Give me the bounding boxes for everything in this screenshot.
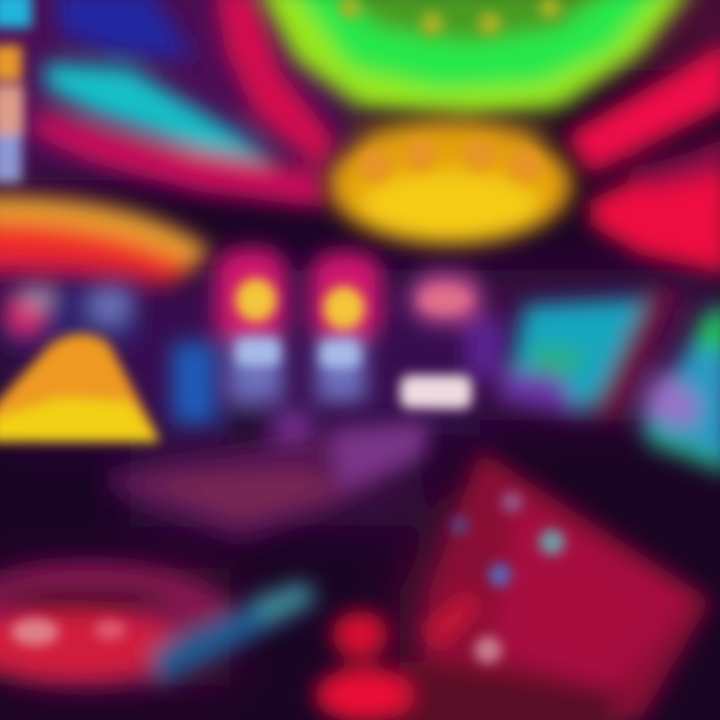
slot lights and white card — [235, 278, 472, 409]
bar and central floor — [100, 420, 430, 540]
roulette table, bottom left — [0, 563, 320, 687]
red craps table — [390, 450, 712, 720]
central pink slot glows — [172, 248, 505, 462]
green canopy yellow lights — [339, 0, 561, 36]
red chips bottom centre — [315, 590, 480, 720]
yellow chandelier — [328, 114, 572, 245]
rainbow arc, left — [0, 195, 212, 295]
roulette highlights — [11, 618, 126, 646]
yellow pyramid table — [0, 334, 160, 442]
chandelier lights — [358, 139, 542, 182]
green chandelier canopy — [255, 0, 695, 122]
table chips — [451, 491, 565, 664]
left machines — [0, 285, 140, 345]
right screens — [500, 290, 720, 475]
left edge column lights — [0, 0, 32, 183]
ceiling panels — [35, 0, 720, 275]
